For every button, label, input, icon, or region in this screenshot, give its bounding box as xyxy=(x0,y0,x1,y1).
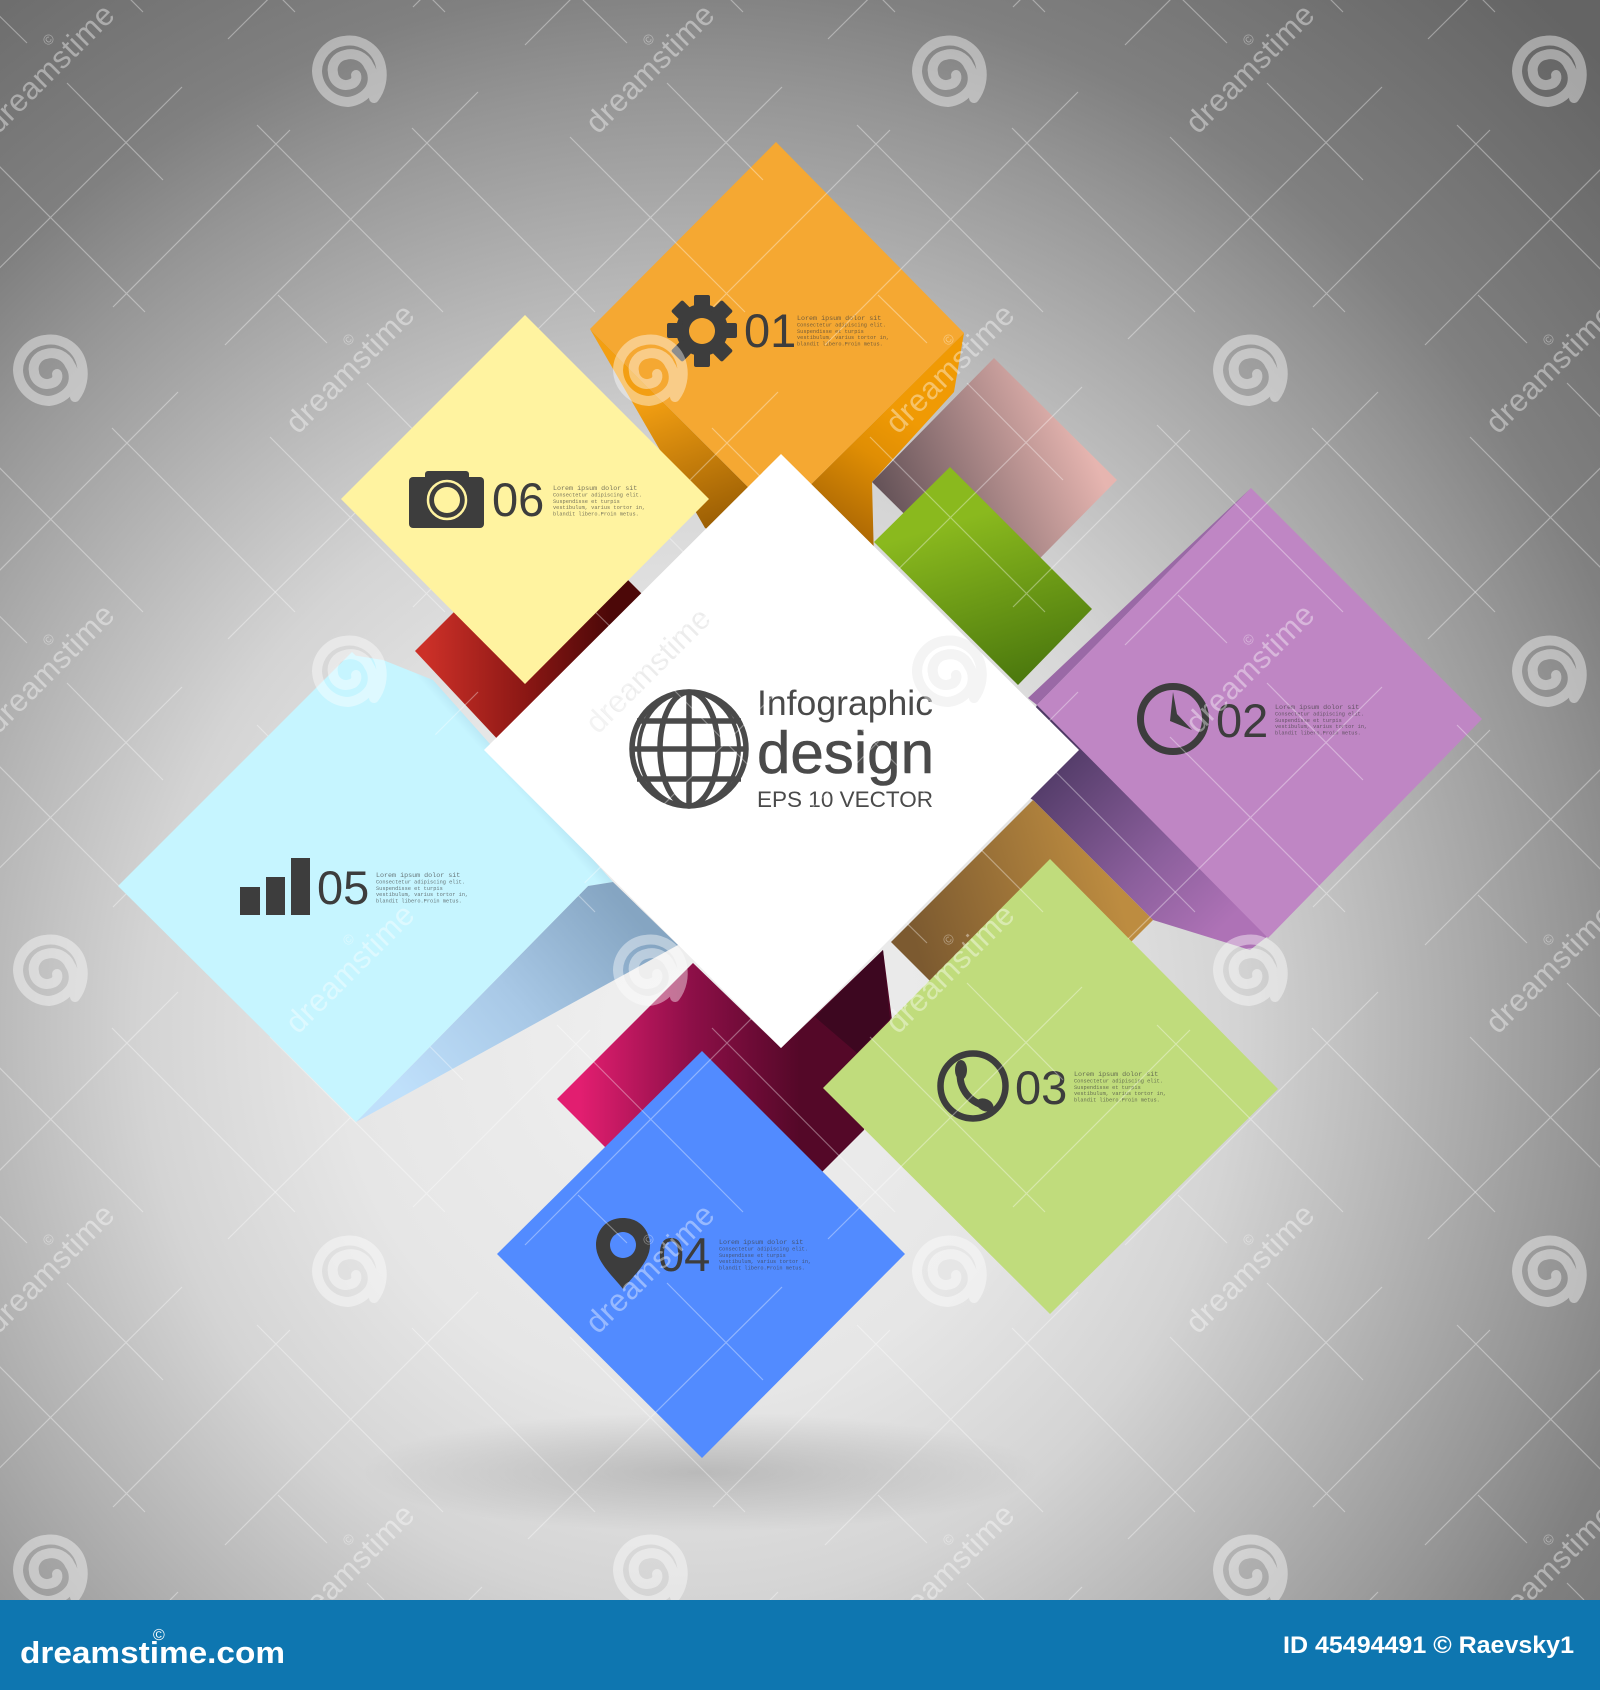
watermark wordmarks: © xyxy=(39,630,58,649)
watermark wordmarks: © xyxy=(939,930,958,949)
item 01 content xyxy=(667,295,889,367)
footer logo copyright mark: © xyxy=(153,1627,165,1644)
body text 03: Suspendisse et turpis xyxy=(1074,1085,1141,1091)
watermark wordmarks: © xyxy=(639,30,658,49)
panel: 06 yellow xyxy=(341,315,709,684)
watermark wordmarks: dreamstime xyxy=(1178,0,1322,140)
block: mauve xyxy=(872,358,1117,604)
footer bar xyxy=(0,1600,1600,1690)
watermark wordmarks: © xyxy=(1239,1230,1258,1249)
body text 05: Consectetur adipiscing elit. xyxy=(376,879,465,885)
watermark wordmarks: © xyxy=(1539,1530,1558,1549)
body text 04: vestibulum, varius tortor in, xyxy=(719,1259,811,1265)
icon: bar chart xyxy=(240,858,310,915)
box side: left xyxy=(590,329,778,560)
watermark wordmarks: © xyxy=(939,1530,958,1549)
watermark wordmarks: dreamstime xyxy=(578,596,722,740)
box side: upper xyxy=(1028,488,1251,705)
number 02: 02 xyxy=(1216,694,1268,747)
body text 04: Lorem ipsum dolor sit xyxy=(719,1239,803,1247)
body text 04: Consectetur adipiscing elit. xyxy=(719,1246,808,1252)
panel: 05 light blue box xyxy=(118,652,678,1122)
magenta dark fold xyxy=(815,950,890,1053)
box face xyxy=(118,652,588,1122)
body text 06: vestibulum, varius tortor in, xyxy=(553,505,645,511)
panel: 02 purple box xyxy=(1000,488,1482,950)
ground shadow xyxy=(360,1412,1040,1532)
watermark wordmarks: © xyxy=(39,1230,58,1249)
box side: upper xyxy=(352,655,613,886)
block: green xyxy=(874,467,1092,685)
panel: centre white diamond xyxy=(484,454,1079,1048)
body text 01: blandit libero.Proin metus. xyxy=(797,342,883,348)
box face xyxy=(1037,488,1482,938)
item 06 content xyxy=(409,471,645,528)
watermark wordmarks: dreamstime xyxy=(278,1496,422,1640)
body text 04: Suspendisse et turpis xyxy=(719,1253,786,1259)
watermark wordmarks: © xyxy=(639,630,658,649)
number 01: 01 xyxy=(744,304,796,357)
body text 03: Consectetur adipiscing elit. xyxy=(1074,1078,1163,1084)
number 03: 03 xyxy=(1015,1061,1067,1114)
heading: Infographic: Infographic xyxy=(757,684,933,723)
number 05: 05 xyxy=(317,861,369,914)
watermark wordmarks: © xyxy=(1539,330,1558,349)
icon: globe xyxy=(632,692,746,806)
icon: camera xyxy=(409,471,484,528)
white diamond xyxy=(484,454,1079,1048)
watermark wordmarks: © xyxy=(339,1530,358,1549)
panel: 03 lime xyxy=(823,859,1278,1314)
watermark wordmarks: © xyxy=(1239,30,1258,49)
body text 01: Suspendisse et turpis xyxy=(797,329,864,335)
watermark wordmarks: © xyxy=(639,1230,658,1249)
body text 03: vestibulum, varius tortor in, xyxy=(1074,1091,1166,1097)
icon: gear xyxy=(667,295,737,367)
body text 01: Consectetur adipiscing elit. xyxy=(797,322,886,328)
icon: map pin xyxy=(596,1218,650,1289)
body text 05: Suspendisse et turpis xyxy=(376,886,443,892)
panel: 04 blue xyxy=(497,1051,905,1458)
box side: right xyxy=(778,333,964,560)
box side: lower xyxy=(1000,705,1268,950)
block: magenta xyxy=(557,950,892,1268)
watermark wordmarks: dreamstime xyxy=(878,1496,1022,1640)
body text 05: vestibulum, varius tortor in, xyxy=(376,892,468,898)
footer logo: dreamstime.com xyxy=(20,1635,285,1670)
block: brown xyxy=(891,800,1153,1062)
body text 06: blandit libero.Proin metus. xyxy=(553,512,639,518)
body text 01: Lorem ipsum dolor sit xyxy=(797,315,881,323)
watermark wordmarks: dreamstime xyxy=(278,896,422,1040)
body text 06: Lorem ipsum dolor sit xyxy=(553,485,637,493)
body text 04: blandit libero.Proin metus. xyxy=(719,1266,805,1272)
watermark wordmarks: © xyxy=(339,930,358,949)
number 04: 04 xyxy=(658,1228,710,1281)
item 03 content xyxy=(940,1054,1166,1118)
watermark wordmarks: dreamstime xyxy=(878,896,1022,1040)
panel: 01 orange box xyxy=(590,142,964,560)
body text 02: Consectetur adipiscing elit. xyxy=(1275,711,1364,717)
number 06: 06 xyxy=(492,473,544,526)
box face xyxy=(590,142,964,517)
body text 05: Lorem ipsum dolor sit xyxy=(376,872,460,880)
icon: clock xyxy=(1140,686,1206,752)
heading: design: design xyxy=(757,720,934,786)
body text 01: vestibulum, varius tortor in, xyxy=(797,335,889,341)
body text 06: Consectetur adipiscing elit. xyxy=(553,492,642,498)
body text 05: blandit libero.Proin metus. xyxy=(376,899,462,905)
watermark wordmarks: dreamstime xyxy=(578,1196,722,1340)
body text 02: vestibulum, varius tortor in, xyxy=(1275,724,1367,730)
watermark wordmarks: dreamstime xyxy=(1178,596,1322,740)
item 04 content xyxy=(596,1218,811,1289)
body text 02: Lorem ipsum dolor sit xyxy=(1275,704,1359,712)
body text 03: blandit libero.Proin metus. xyxy=(1074,1098,1160,1104)
block: dark red xyxy=(415,509,690,790)
faint wordmark: dreamstime xyxy=(578,601,717,740)
icon: phone xyxy=(940,1054,1006,1118)
subheading: EPS 10 VECTOR xyxy=(757,787,933,812)
item 02 content xyxy=(1140,686,1367,752)
body text 06: Suspendisse et turpis xyxy=(553,499,620,505)
watermark wordmarks: © xyxy=(1239,630,1258,649)
watermark wordmarks: dreamstime xyxy=(278,296,422,440)
watermark wordmarks: dreamstime xyxy=(578,0,722,140)
faint watermark on white xyxy=(578,601,982,740)
bar background xyxy=(0,1600,1600,1690)
body text 02: blandit libero.Proin metus. xyxy=(1275,731,1361,737)
magenta band xyxy=(557,950,892,1268)
watermark wordmarks: © xyxy=(1539,930,1558,949)
watermark wordmarks: dreamstime xyxy=(1178,1196,1322,1340)
body text 03: Lorem ipsum dolor sit xyxy=(1074,1071,1158,1079)
box side: lower xyxy=(356,882,678,1122)
watermark wordmarks: dreamstime xyxy=(878,296,1022,440)
footer credit: ID 45494491 © Raevsky1 xyxy=(1283,1632,1574,1659)
faint swirl xyxy=(917,641,982,702)
body text 02: Suspendisse et turpis xyxy=(1275,718,1342,724)
watermark wordmarks: © xyxy=(39,30,58,49)
watermark wordmarks: © xyxy=(339,330,358,349)
watermark wordmarks: © xyxy=(939,330,958,349)
item 05 content xyxy=(240,858,468,915)
